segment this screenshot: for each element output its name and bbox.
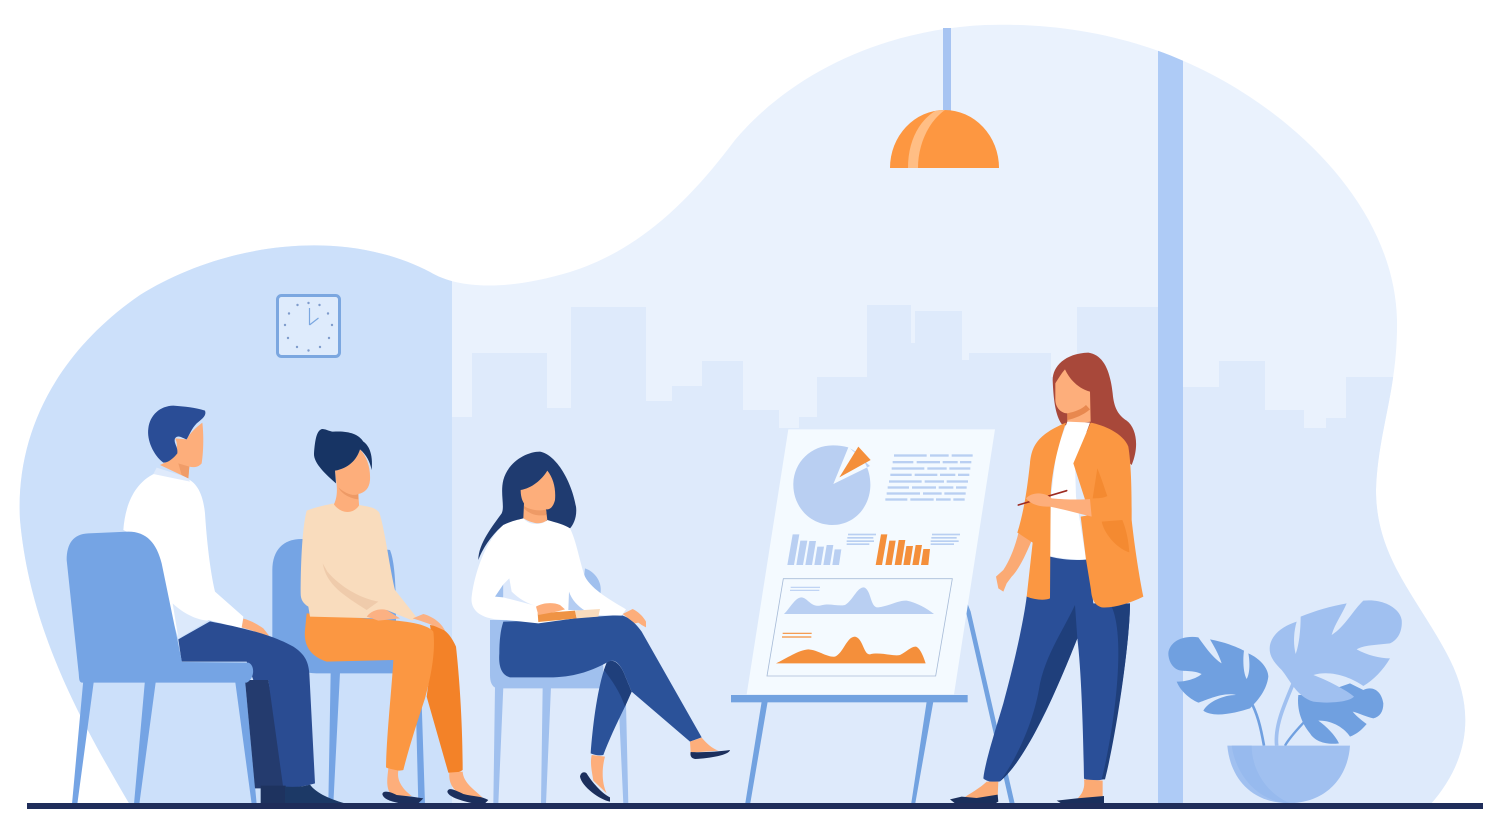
woman two neck shadow <box>338 487 358 499</box>
seated woman in white <box>471 452 730 804</box>
easel back leg <box>966 602 1015 805</box>
woman three shoes <box>580 750 730 802</box>
pie chart <box>793 445 870 525</box>
sweater shadow <box>323 563 378 610</box>
man neck shadow <box>178 463 189 478</box>
hand on book <box>536 603 565 615</box>
presenter woman <box>950 353 1143 805</box>
presenter upper body <box>996 353 1143 607</box>
woman three lower leg <box>591 663 632 755</box>
woman three pants crossed leg <box>499 615 702 742</box>
wall clock <box>278 296 340 356</box>
chair two <box>272 539 425 804</box>
orange area chart <box>776 637 926 663</box>
woman two shoes <box>382 789 488 805</box>
presenter feet <box>962 779 1103 799</box>
ceiling lamp <box>890 28 999 168</box>
orange chart title lines <box>782 633 812 637</box>
blue chart title lines <box>790 587 820 590</box>
seated woman in beige <box>301 429 488 805</box>
plant stems <box>1250 682 1306 746</box>
jacket shadows <box>1093 468 1129 552</box>
woman two head <box>314 429 372 513</box>
gap showing chair right <box>568 592 585 611</box>
leaf large <box>1270 600 1402 703</box>
window pillar <box>1158 0 1183 805</box>
presenter jacket right panel <box>1073 423 1143 607</box>
easel front legs <box>745 702 933 805</box>
man shirt shadow <box>173 603 208 638</box>
board sheet <box>747 429 995 694</box>
presenter leg shadow <box>1000 603 1130 781</box>
man far leg <box>245 680 287 788</box>
pie slice <box>839 447 871 477</box>
pen <box>1018 491 1067 505</box>
area chart frame <box>767 579 952 676</box>
man hair <box>148 406 205 463</box>
hand on knee <box>623 609 646 627</box>
orange bar chart <box>876 534 930 565</box>
city skyline <box>452 305 1500 805</box>
woman three feet <box>591 738 718 793</box>
woman two hands <box>367 609 445 631</box>
woman two orange far leg <box>427 625 463 773</box>
chair one back and seat <box>67 532 253 683</box>
woman three hair <box>478 452 576 560</box>
presenter lower arm and hand <box>996 533 1032 592</box>
easel shelf <box>731 695 968 702</box>
woman three sweater <box>471 518 626 623</box>
leaf lower right <box>1298 683 1383 744</box>
floor line <box>27 803 1483 809</box>
chair two legs <box>328 673 425 804</box>
chair three back and seat <box>490 620 603 688</box>
chair one legs <box>72 680 257 804</box>
orange bar legend lines <box>931 534 960 545</box>
gap showing pale shadow <box>503 578 535 606</box>
blue bar legend lines <box>847 534 876 545</box>
man shirt <box>123 473 243 638</box>
presenter jacket left panel <box>1017 423 1066 600</box>
plant pot <box>1227 746 1350 803</box>
woman three upper body <box>471 471 626 623</box>
man far shoe <box>261 786 286 804</box>
seated man <box>67 406 345 804</box>
presenter shirt <box>1050 422 1090 559</box>
neck shadow <box>1067 405 1090 420</box>
woman two hair <box>314 429 372 483</box>
book pages <box>575 609 600 618</box>
book <box>538 611 577 622</box>
leaf left <box>1168 637 1268 714</box>
pot shading <box>1232 746 1290 803</box>
man near leg <box>178 621 315 788</box>
presenter legs <box>983 557 1130 782</box>
gap showing chair left <box>495 584 503 597</box>
presenter forearm and hand <box>1026 493 1092 517</box>
man head <box>148 406 205 482</box>
presenter face and neck <box>1055 369 1091 425</box>
blue bar chart <box>787 534 841 565</box>
woman three face and neck <box>521 471 555 523</box>
chair three legs <box>493 687 628 804</box>
houseplant <box>1168 600 1402 803</box>
man neck and face <box>160 423 203 478</box>
presenter hair <box>1053 353 1136 465</box>
woman three neck shadow <box>524 506 547 515</box>
man near shoe <box>285 785 345 804</box>
woman two face and neck <box>333 449 370 513</box>
man hand <box>242 619 269 636</box>
woman three dark leg overlay <box>604 661 632 707</box>
flip chart easel and board <box>731 429 1015 805</box>
blue area chart <box>784 587 934 614</box>
chair three back top <box>580 568 601 612</box>
presenter shoes <box>950 795 1104 805</box>
woman two orange near leg <box>305 613 434 771</box>
man collar <box>153 468 190 482</box>
woman two sweater <box>301 503 416 621</box>
text lines <box>885 454 973 501</box>
woman two feet <box>387 768 483 798</box>
chair two back and seat <box>272 539 397 673</box>
